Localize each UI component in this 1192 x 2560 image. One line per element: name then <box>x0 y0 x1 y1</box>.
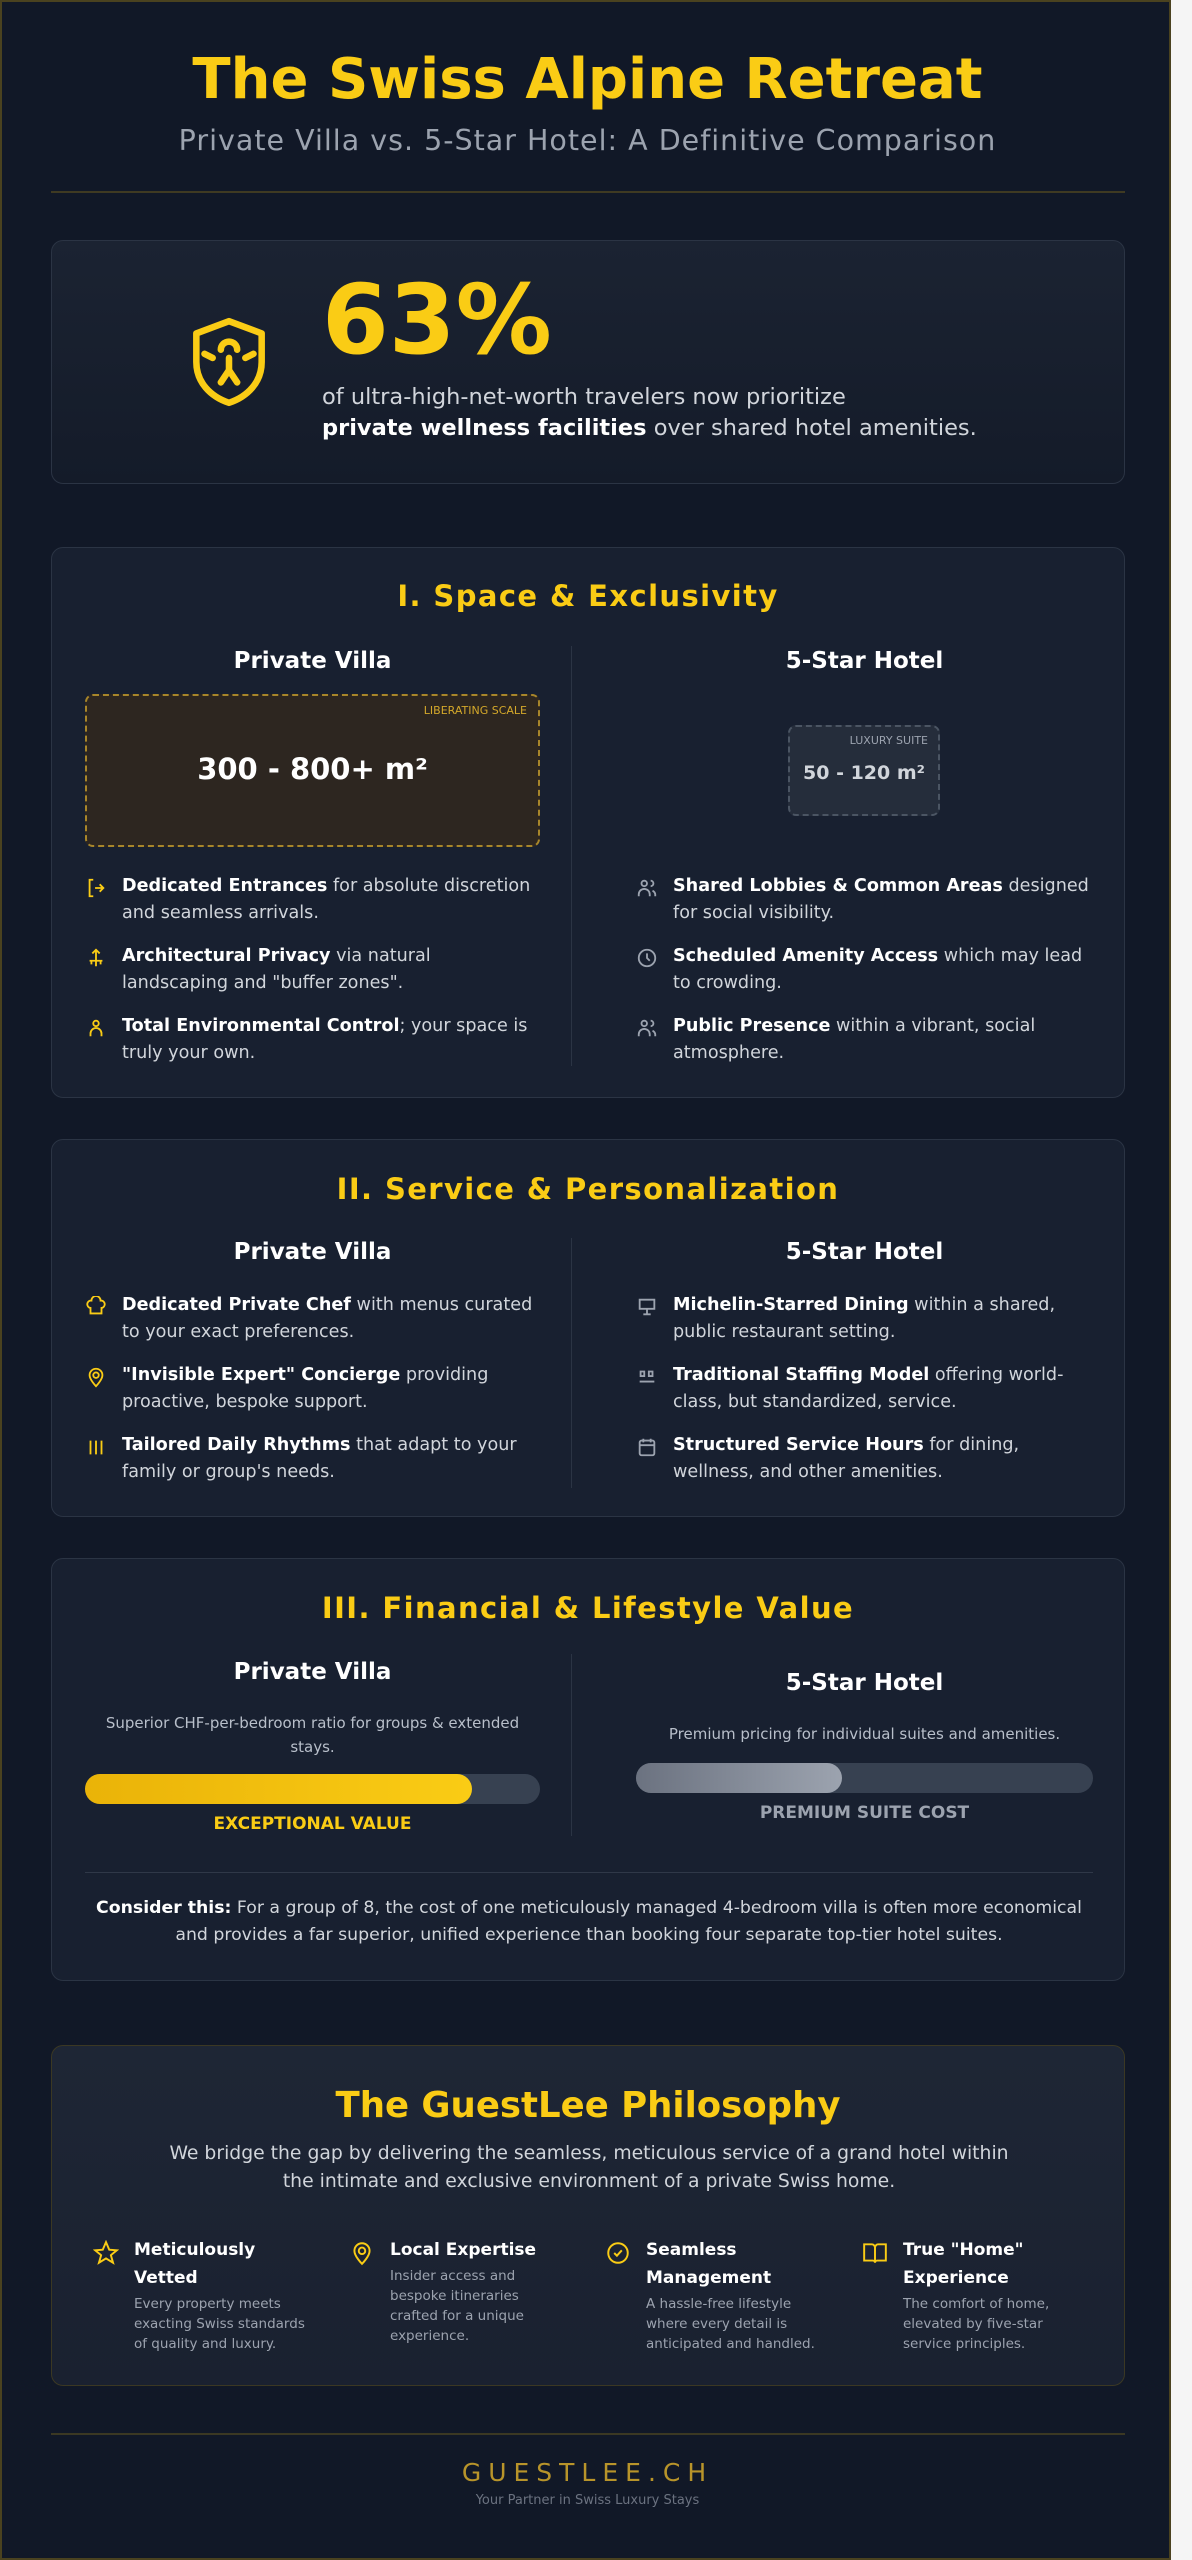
item: local expertise: Local Expertise <box>390 2240 536 2260</box>
villa bar <box>85 1774 540 1804</box>
item: scheduled: Scheduled Amenity Access which may lead to crowding. <box>673 946 1082 993</box>
icon: shield <box>193 318 265 406</box>
hotel bar <box>636 1763 1093 1793</box>
hotel label: PREMIUM SUITE COST <box>760 1803 969 1823</box>
big number: 63% <box>322 264 552 376</box>
panel: philosophy <box>51 2045 1125 2386</box>
hotel list <box>638 1295 1063 1482</box>
item: vetted <box>93 2240 305 2352</box>
villa header: Private Villa <box>234 648 391 674</box>
hotel space box <box>788 725 940 816</box>
subtitle: Private Villa vs. 5-Star Hotel: A Definitive Comparison <box>179 124 996 157</box>
item: home <box>863 2240 1049 2352</box>
hotel header: 5-Star Hotel <box>786 1239 943 1265</box>
heading: II. Service & Personalization <box>337 1172 839 1206</box>
item: privacy: Architectural Privacy via natural landscaping and "buffer zones". <box>122 946 431 993</box>
villa header: Private Villa <box>234 1239 391 1265</box>
villa space box <box>85 694 540 847</box>
item: local expertise: Insider access and bespoke itineraries crafted for a unique experience. <box>390 2268 524 2344</box>
item: rhythms: Tailored Daily Rhythms that adapt to your family or group's needs. <box>122 1435 517 1482</box>
item: seamless: Seamless Management <box>646 2240 771 2288</box>
item: concierge: "Invisible Expert" Concierge providing proactive, bespoke support. <box>122 1365 488 1412</box>
footer tagline: Your Partner in Swiss Luxury Stays <box>476 2493 699 2508</box>
item: chef: Dedicated Private Chef with menus curated to your exact preferences. <box>122 1295 532 1342</box>
hotel header: 5-Star Hotel <box>786 1670 943 1696</box>
villa label: EXCEPTIONAL VALUE <box>214 1814 411 1834</box>
item: vetted: Meticulously Vetted <box>134 2240 255 2288</box>
item: hours: Structured Service Hours for dining, wellness, and other amenities. <box>673 1435 1019 1482</box>
heading: III. Financial & Lifestyle Value <box>322 1591 854 1625</box>
item: public: Public Presence within a vibrant, social atmosphere. <box>673 1016 1035 1063</box>
heading: The GuestLee Philosophy <box>335 2085 840 2126</box>
item: entrances: Dedicated Entrances for absolute discretion and seamless arrivals. <box>122 876 530 923</box>
title: The Swiss Alpine Retreat <box>192 47 983 112</box>
item: local expertise <box>353 2240 536 2344</box>
panel: space & exclusivity <box>51 547 1125 1098</box>
callout: consider this: Consider this: For a group of 8, the cost of one meticulously managed 4-bedroom villa is often more economical and provides a far superior, unified experience than booking four separate top-tier hotel suites. <box>96 1898 1082 1945</box>
hotel header: 5-Star Hotel <box>786 648 943 674</box>
stat text: private wellness facilities over shared hotel amenities. <box>322 415 977 441</box>
panel: service & personalization <box>51 1139 1125 1517</box>
hotel space box: LUXURY SUITE <box>850 734 928 747</box>
villa space box: 300 - 800+ m² <box>197 752 428 786</box>
villa list <box>88 876 530 1063</box>
item: michelin: Michelin-Starred Dining within a shared, public restaurant setting. <box>673 1295 1055 1342</box>
hotel space box: 50 - 120 m² <box>803 762 925 784</box>
item: staffing: Traditional Staffing Model offering world-class, but standardized, service. <box>673 1365 1063 1412</box>
item: home: The comfort of home, elevated by five-star service principles. <box>903 2296 1049 2352</box>
item: vetted: Every property meets exacting Swiss standards of quality and luxury. <box>134 2296 305 2352</box>
villa header: Private Villa <box>234 1659 391 1685</box>
panel: key stat <box>51 240 1125 484</box>
item: lobbies: Shared Lobbies & Common Areas designed for social visibility. <box>673 876 1089 923</box>
panel: financial value <box>51 1558 1125 1981</box>
item: seamless: A hassle-free lifestyle where every detail is anticipated and handled. <box>646 2296 815 2352</box>
villa list <box>86 1295 532 1482</box>
villa space box: LIBERATING SCALE <box>424 704 527 717</box>
paragraph: We bridge the gap by delivering the seamless, meticulous service of a grand hotel within the intimate and exclusive environment of a private Swiss home. <box>169 2143 1009 2192</box>
hotel description: Premium pricing for individual suites and amenities. <box>669 1725 1060 1743</box>
footer brand: GUESTLEE.CH <box>462 2458 713 2487</box>
item: seamless <box>607 2240 815 2352</box>
item: control: Total Environmental Control; your space is truly your own. <box>122 1016 527 1063</box>
item: home: True "Home" Experience <box>903 2240 1024 2288</box>
stat text <box>322 384 977 441</box>
stat text: of ultra-high-net-worth travelers now prioritize <box>322 384 846 410</box>
heading: I. Space & Exclusivity <box>397 579 779 613</box>
hotel list <box>638 876 1089 1063</box>
villa description: Superior CHF-per-bedroom ratio for groups & extended stays. <box>106 1714 519 1756</box>
